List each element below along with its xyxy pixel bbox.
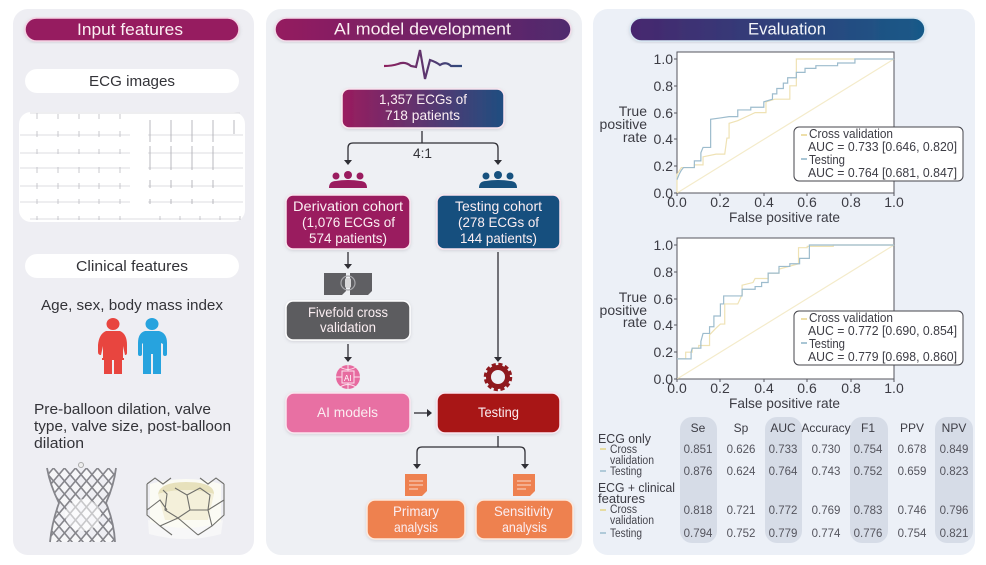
table: metrics: 0.752	[854, 466, 882, 478]
icon: testing cohort people	[479, 171, 517, 188]
table: metrics: 0.821	[940, 528, 968, 540]
ECG image	[19, 112, 245, 222]
heading: AI model development	[275, 18, 571, 41]
chart: ROC ECG only: 0.4	[654, 131, 673, 147]
icon: ECG trace	[384, 50, 462, 79]
arrow: cohort to testing	[494, 252, 502, 362]
label: ECG images	[25, 69, 239, 93]
table: metrics: NPV	[942, 421, 966, 435]
table: metrics: AUC	[770, 421, 796, 435]
chart: ROC ECG plus clinical: 0.6	[797, 380, 817, 396]
table: metrics: Testing	[610, 466, 642, 478]
heading: input features: Input features	[77, 20, 183, 39]
box: total ECGs: 718 patients	[385, 107, 460, 123]
chart: ROC ECG only: rate	[623, 129, 647, 145]
chart: ROC ECG only: 0.8	[841, 194, 861, 210]
box: total ECGs	[342, 89, 504, 128]
icon: sensitivity document	[513, 474, 535, 496]
box: testing: Testing	[478, 404, 519, 420]
table: metrics: 0.876	[684, 466, 712, 478]
label: clinical features: Clinical features	[76, 258, 188, 275]
chart: ROC ECG plus clinical: 1.0	[654, 237, 673, 253]
chart: ROC ECG plus clinical: False positive rate	[729, 395, 840, 411]
box: sensitivity analysis: analysis	[502, 519, 547, 535]
box: derivation cohort: Derivation cohort	[293, 198, 403, 214]
box: derivation cohort	[286, 195, 410, 249]
chart: ROC ECG only	[600, 51, 963, 225]
label: clinical features	[25, 254, 239, 278]
chart: ROC ECG only: 1.0	[654, 51, 673, 67]
table: metrics: 0.659	[898, 466, 926, 478]
table: metrics: 0.794	[684, 528, 713, 540]
table: metrics: 0.743	[812, 466, 840, 478]
legend: chart 2	[794, 310, 963, 365]
table: metrics: 0.721	[727, 505, 755, 517]
chart: ROC ECG plus clinical: True	[619, 289, 647, 305]
text: ratio: 4:1	[413, 145, 432, 161]
chart: ROC ECG plus clinical: positive	[600, 302, 647, 318]
text: procedure features	[34, 401, 231, 452]
icon: AI globe	[336, 365, 360, 389]
legend: chart 1	[794, 126, 963, 181]
table: metrics: 0.818	[684, 505, 712, 517]
table: metrics: 0.796	[940, 505, 968, 517]
legend: chart 1: AUC = 0.764 [0.681, 0.847]	[808, 165, 957, 180]
legend: chart 2: AUC = 0.772 [0.690, 0.854]	[808, 323, 957, 338]
text: procedure features: type, valve size, post-balloon	[34, 418, 231, 435]
table: metrics: 0.772	[769, 505, 797, 517]
table: metrics: Cross	[610, 444, 637, 456]
box: primary analysis	[367, 500, 465, 539]
table: metrics: 0.678	[898, 444, 926, 456]
table: metrics: PPV	[900, 421, 924, 435]
text: age, sex, BMI: Age, sex, body mass index	[41, 297, 224, 314]
box: primary analysis: analysis	[394, 519, 438, 535]
chart: ROC ECG plus clinical: 0.2	[710, 380, 730, 396]
table: metrics: 0.626	[727, 444, 755, 456]
icon: gear	[486, 364, 510, 390]
table: metrics: Sp	[734, 421, 749, 435]
chart: ROC ECG plus clinical: 0.2	[654, 344, 673, 360]
chart: ROC ECG only: 0.2	[654, 158, 673, 174]
chart: ROC ECG only: 1.0	[884, 194, 904, 210]
heading: input features	[25, 18, 239, 41]
table: metrics: 0.851	[684, 444, 712, 456]
icon: woman	[98, 318, 127, 374]
chart: ROC ECG plus clinical: 0.4	[754, 380, 774, 396]
chart: ROC ECG plus clinical: 0.0	[654, 371, 673, 387]
table: metrics: 0.733	[769, 444, 797, 456]
chart: ROC ECG plus clinical: 0.4	[654, 317, 673, 333]
legend: chart 1: AUC = 0.733 [0.646, 0.820]	[808, 139, 957, 154]
box: sensitivity analysis: Sensitivity	[494, 503, 553, 519]
panel: AI model development	[266, 9, 582, 555]
table: metrics: 0.776	[854, 528, 882, 540]
label: ECG images: ECG images	[89, 73, 175, 90]
table: metrics	[598, 417, 973, 543]
chart: ROC ECG plus clinical: rate	[623, 314, 647, 330]
table: metrics: 0.746	[898, 505, 926, 517]
icon: self-expanding valve	[45, 462, 117, 544]
chart: ROC ECG only: False positive rate	[729, 209, 840, 225]
chart: ROC ECG plus clinical: 0.0	[667, 380, 687, 396]
box: AI models: AI models	[317, 404, 378, 420]
chart: ROC ECG plus clinical	[600, 237, 963, 411]
icon: derivation cohort people	[329, 171, 367, 188]
table: metrics: validation	[610, 515, 654, 527]
chart: ROC ECG only: 0.8	[654, 78, 673, 94]
box: total ECGs: 1,357 ECGs of	[379, 91, 467, 107]
chart: ROC ECG only: positive	[600, 116, 647, 132]
table: metrics: 0.754	[898, 528, 927, 540]
table: metrics: Accuracy	[801, 421, 851, 435]
heading: evaluation	[630, 18, 925, 41]
box: testing cohort: (278 ECGs of	[458, 214, 539, 230]
table: metrics: 0.730	[812, 444, 840, 456]
chart: ROC ECG only: 0.0	[667, 194, 687, 210]
text: procedure features: Pre-balloon dilation, valve	[34, 401, 211, 418]
box: sensitivity analysis	[476, 500, 573, 539]
box: derivation cohort: 574 patients)	[309, 230, 387, 246]
icon: AI globe: AI	[344, 374, 352, 383]
box: testing	[437, 393, 560, 433]
table: metrics: 0.783	[854, 505, 882, 517]
arrow: cross validation to AI models	[344, 344, 352, 362]
table: metrics: Testing	[610, 528, 642, 540]
table: metrics: features	[598, 491, 645, 506]
table: metrics: 0.752	[727, 528, 755, 540]
chart: ROC ECG plus clinical: 0.8	[654, 264, 673, 280]
table: metrics: 0.754	[854, 444, 883, 456]
panel: evaluation	[593, 9, 975, 555]
chart: ROC ECG only: True	[619, 103, 647, 119]
table: metrics: ECG only	[598, 431, 651, 446]
arrow: derivation to cross validation	[344, 252, 352, 269]
table: metrics: 0.774	[812, 528, 841, 540]
arrow: testing to analyses	[413, 436, 529, 469]
box: fivefold cross validation: Fivefold cross	[308, 304, 388, 320]
box: AI models	[286, 393, 410, 433]
legend: chart 2: Cross validation	[809, 310, 893, 325]
box: derivation cohort: (1,076 ECGs of	[302, 214, 395, 230]
chart: ROC ECG only: 0.6	[654, 105, 673, 121]
icon: folded documents	[324, 273, 372, 295]
table: metrics: 0.849	[940, 444, 968, 456]
box: fivefold cross validation	[286, 301, 410, 340]
text: procedure features: dilation	[34, 435, 84, 452]
box: testing cohort	[437, 195, 560, 249]
chart: ROC ECG only: 0.6	[797, 194, 817, 210]
icon: man	[138, 318, 167, 374]
table: metrics: Se	[691, 421, 706, 435]
heading: evaluation: Evaluation	[748, 20, 826, 38]
box: testing cohort: Testing cohort	[455, 198, 542, 214]
table: metrics: 0.823	[940, 466, 968, 478]
box: primary analysis: Primary	[393, 503, 439, 519]
table: metrics: ECG + clinical	[598, 480, 675, 495]
panel: input features	[13, 9, 254, 555]
table: metrics: 0.779	[769, 528, 797, 540]
chart: ROC ECG plus clinical: 1.0	[884, 380, 904, 396]
box: testing cohort: 144 patients)	[460, 230, 537, 246]
table: metrics: 0.769	[812, 505, 840, 517]
table: metrics: 0.764	[769, 466, 798, 478]
chart: ROC ECG plus clinical: 0.6	[654, 291, 673, 307]
chart: ROC ECG only: 0.2	[710, 194, 730, 210]
legend: chart 1: Testing	[809, 152, 845, 167]
chart: ROC ECG only: 0.4	[754, 194, 774, 210]
chart: ROC ECG plus clinical: 0.8	[841, 380, 861, 396]
chart: ROC ECG only: 0.0	[654, 185, 673, 201]
arrow: split to cohorts	[344, 131, 502, 165]
arrow: AI models to testing	[414, 409, 432, 417]
table: metrics: F1	[861, 421, 875, 435]
box: fivefold cross validation: validation	[320, 319, 376, 335]
legend: chart 1: Cross validation	[809, 126, 893, 141]
table: metrics: validation	[610, 455, 654, 467]
legend: chart 2: Testing	[809, 336, 845, 351]
icon: primary document	[405, 474, 427, 496]
table: metrics: Cross	[610, 504, 637, 516]
icon: balloon-expandable valve	[147, 478, 224, 539]
heading: AI model development: AI model development	[334, 20, 511, 38]
legend: chart 2: AUC = 0.779 [0.698, 0.860]	[808, 349, 957, 364]
table: metrics: 0.624	[727, 466, 756, 478]
